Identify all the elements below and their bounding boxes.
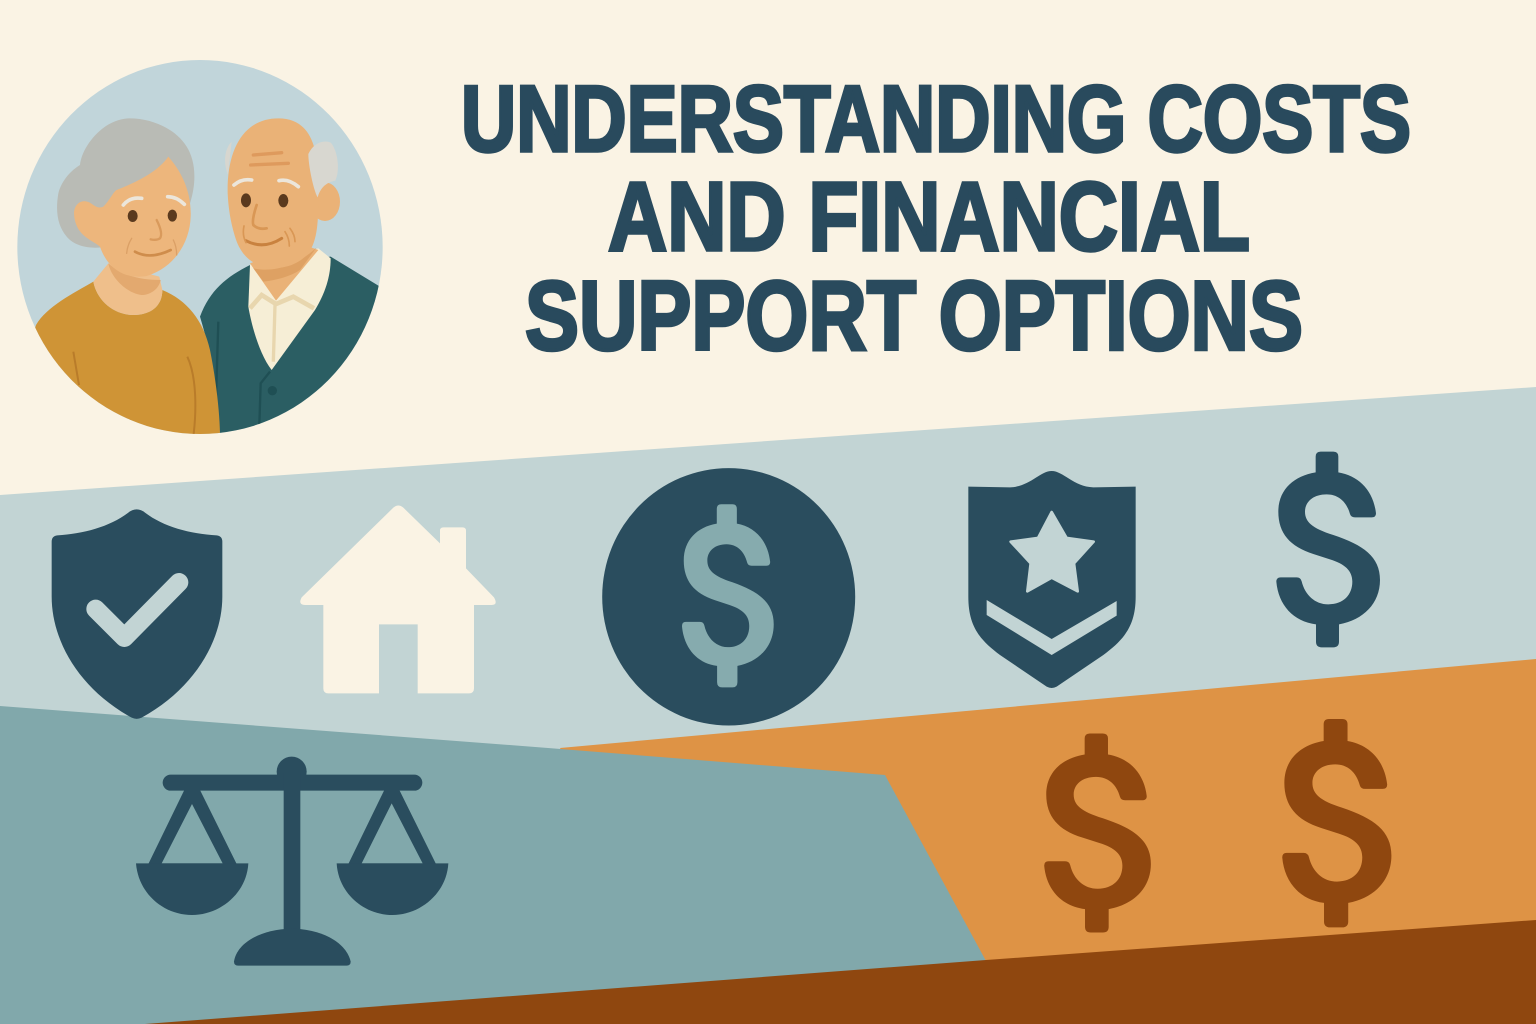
man: white hair [308, 142, 338, 197]
man: head [228, 118, 318, 268]
band: teal [0, 706, 986, 1024]
icon: badge shield with star [968, 471, 1136, 688]
woman: facial features [123, 197, 184, 255]
title line 2: AND FINANCIAL [608, 162, 1250, 271]
icon: shield with check [52, 509, 222, 719]
man: side hair left [225, 142, 232, 175]
icon: dollar sign brown right [1282, 719, 1391, 927]
man: cardigan [200, 257, 380, 437]
icon: house [300, 505, 496, 693]
icon: dollar sign brown left [1044, 733, 1151, 932]
woman: hair [57, 118, 194, 248]
portrait: elderly couple [0, 60, 383, 437]
band: brown [145, 920, 1536, 1024]
man: neck [250, 243, 318, 301]
man: ear [318, 183, 340, 221]
woman: neck shadow [108, 263, 161, 295]
icon: dollar sign navy [1276, 452, 1380, 647]
band: light blue-grey [0, 387, 1536, 800]
title line 3: SUPPORT OPTIONS [525, 260, 1303, 370]
man: shirt [248, 248, 331, 370]
icon: dollar coin [602, 468, 855, 726]
title [461, 66, 1411, 370]
woman: sweater [35, 282, 220, 434]
man: chin shadow [253, 247, 317, 282]
man: facial features [234, 153, 298, 246]
band: orange [560, 659, 1536, 1024]
woman: face [74, 157, 191, 277]
icon: balance scales [136, 757, 448, 966]
woman: neck [93, 263, 162, 315]
